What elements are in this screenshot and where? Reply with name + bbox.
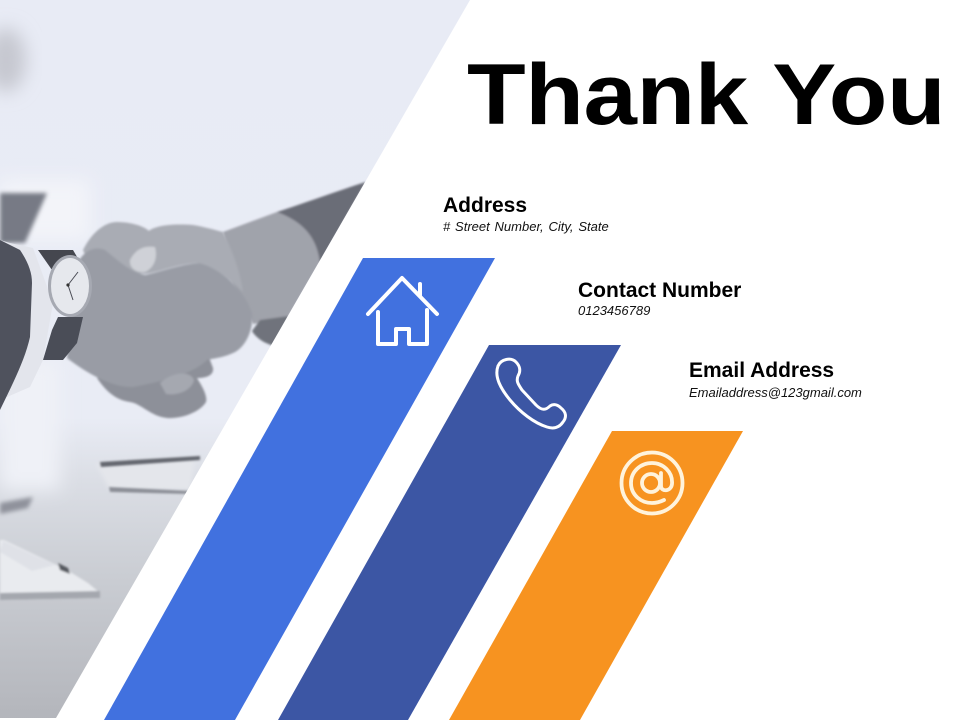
text block: address: # Street Number, City, State	[443, 219, 609, 234]
panel: handshake photo	[0, 0, 480, 720]
text block: contact number: Contact Number	[578, 279, 741, 302]
icon: at sign	[622, 452, 682, 514]
title: Thank You	[467, 47, 945, 143]
icon: telephone	[497, 359, 565, 428]
icon: house	[368, 278, 437, 344]
text block: address	[443, 194, 609, 234]
bar: orange email	[449, 431, 743, 720]
wrist watch	[38, 250, 92, 360]
text block: contact number: 0123456789	[578, 303, 650, 318]
text block: email address	[689, 359, 862, 400]
text block: contact number	[578, 279, 741, 318]
pens and papers on desk	[106, 476, 189, 488]
text block: email address: Emailaddress@123gmail.com	[689, 385, 862, 400]
text block: email address: Email Address	[689, 359, 834, 382]
bar: dark blue contact number	[278, 345, 621, 720]
shirt cuff and jacket sleeve	[0, 240, 53, 410]
text block: address: Address	[443, 194, 527, 217]
bar: blue address	[104, 258, 495, 720]
far arm and sleeve	[223, 182, 366, 346]
laptop screen	[0, 180, 90, 490]
clasped hands	[67, 222, 252, 418]
artwork: photo, bars and icons	[0, 0, 743, 720]
